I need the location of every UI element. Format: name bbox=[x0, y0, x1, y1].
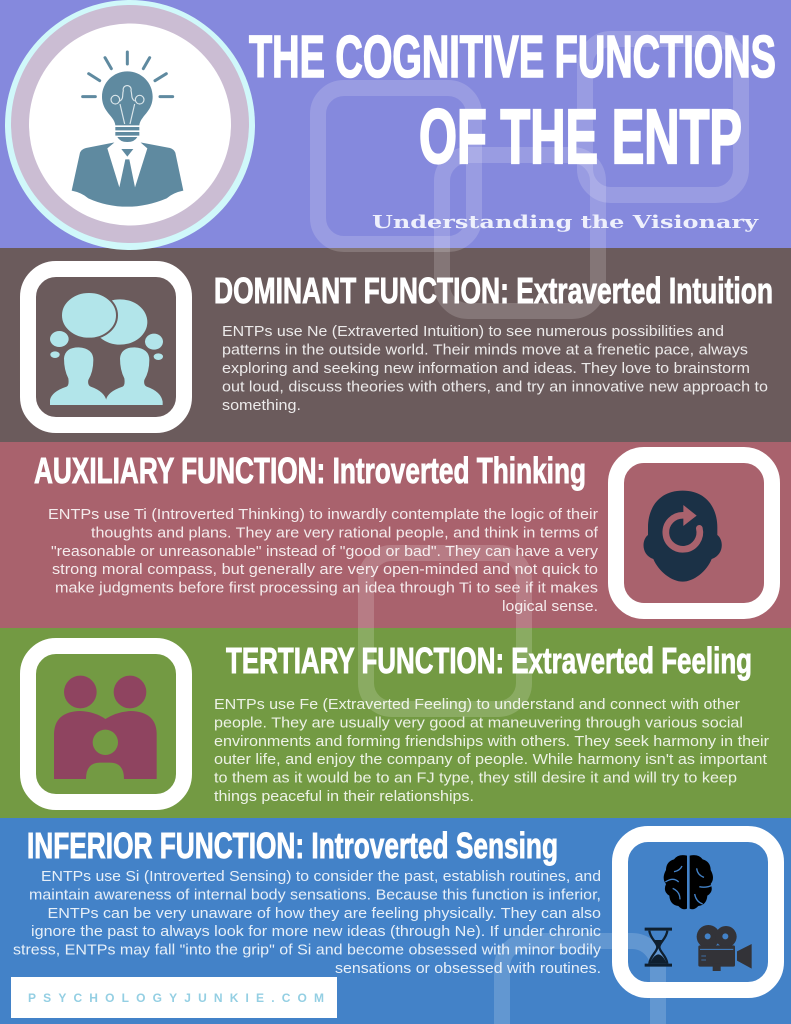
text block: exploring and seeking new information and ideas. They love to brainstorm bbox=[222, 360, 750, 377]
heading: AUXILIARY FUNCTION: Introverted Thinking bbox=[34, 450, 586, 491]
icon: hourglass bbox=[645, 928, 672, 967]
heading: INFERIOR FUNCTION: Introverted Sensing bbox=[27, 825, 558, 866]
text block: ENTPs use Ti (Introverted Thinking) to inwardly contemplate the logic of their bbox=[48, 506, 598, 523]
icon: two people with speech bubbles bbox=[50, 292, 163, 405]
text block: logical sense. bbox=[502, 598, 598, 615]
text block: ENTPs use Ne (Extraverted Intuition) to see numerous possibilities and bbox=[222, 323, 724, 340]
text block: ignore the past to always look for more new ideas (through Ne). If under chronic bbox=[31, 923, 602, 940]
text block: ENTPs use Fe (Extraverted Feeling) to understand and connect with other bbox=[214, 696, 740, 713]
icon frame with brain, hourglass and camera bbox=[620, 834, 776, 990]
text block bbox=[214, 696, 769, 805]
icon: brain bbox=[664, 855, 713, 909]
text block: to them as it would be to an FJ type, they still desire it and will try to keep bbox=[214, 770, 737, 787]
text block bbox=[48, 506, 599, 615]
icon: lightbulb businessman bbox=[72, 52, 183, 207]
text block bbox=[13, 868, 602, 977]
text block: maintain awareness of internal body sensations. Because this function is inferior, bbox=[29, 886, 601, 903]
text block: strong moral compass, but generally are very open-minded and not quick to bbox=[52, 561, 598, 578]
icon: two people embracing bbox=[54, 676, 157, 779]
panel: auxiliary function bbox=[0, 442, 791, 628]
text block bbox=[222, 323, 768, 414]
text block: thoughts and plans. They are very rational people, and think in terms of bbox=[91, 524, 599, 542]
text block: things peaceful in their relationships. bbox=[214, 788, 474, 805]
icon frame with two people bbox=[28, 646, 184, 802]
icon: film camera bbox=[697, 925, 752, 971]
text block: sensations or obsessed with routines. bbox=[335, 960, 601, 977]
panel: tertiary function bbox=[0, 628, 791, 818]
text block: "reasonable or unreasonable" instead of "good or bad". They can have a very bbox=[51, 543, 599, 560]
text block: environments and forming friendships with others. They seek harmony in their bbox=[214, 733, 769, 750]
text block: make judgments before first processing an idea through Ti to see if it makes bbox=[55, 580, 598, 596]
panel: header bbox=[0, 0, 791, 250]
icon: head with rotating arrow bbox=[644, 491, 722, 582]
text block: out loud, discuss theories with others, and try an innovative new approach to bbox=[222, 378, 768, 396]
panel: inferior function bbox=[0, 818, 791, 1024]
logo box bbox=[11, 977, 337, 1018]
icon frame with two people talking bbox=[28, 269, 184, 425]
text block: ENTPs can be very unaware of how they are feeling physically. They can also bbox=[48, 905, 601, 922]
text block: people. They are usually very good at maneuvering through various social bbox=[214, 714, 743, 731]
text block: something. bbox=[222, 397, 301, 414]
badge: lightbulb head businessman bbox=[5, 0, 255, 250]
icon frame with head and rotating arrow bbox=[616, 455, 772, 611]
text block: outer life, and enjoy the company of people. While harmony isn't as important bbox=[214, 751, 768, 768]
logo box: PSYCHOLOGYJUNKIE.COM bbox=[28, 991, 324, 1005]
text block: patterns in the outside world. Their minds move at a frenetic pace, always bbox=[222, 342, 748, 358]
panel: dominant function bbox=[0, 248, 791, 442]
text block: ENTPs use Si (Introverted Sensing) to consider the past, establish routines, and bbox=[41, 868, 601, 885]
title bbox=[249, 24, 776, 180]
subtitle: Understanding the Visionary bbox=[372, 212, 759, 233]
text block: stress, ENTPs may fall "into the grip" of Si and become obsessed with minor bodily bbox=[13, 942, 602, 959]
